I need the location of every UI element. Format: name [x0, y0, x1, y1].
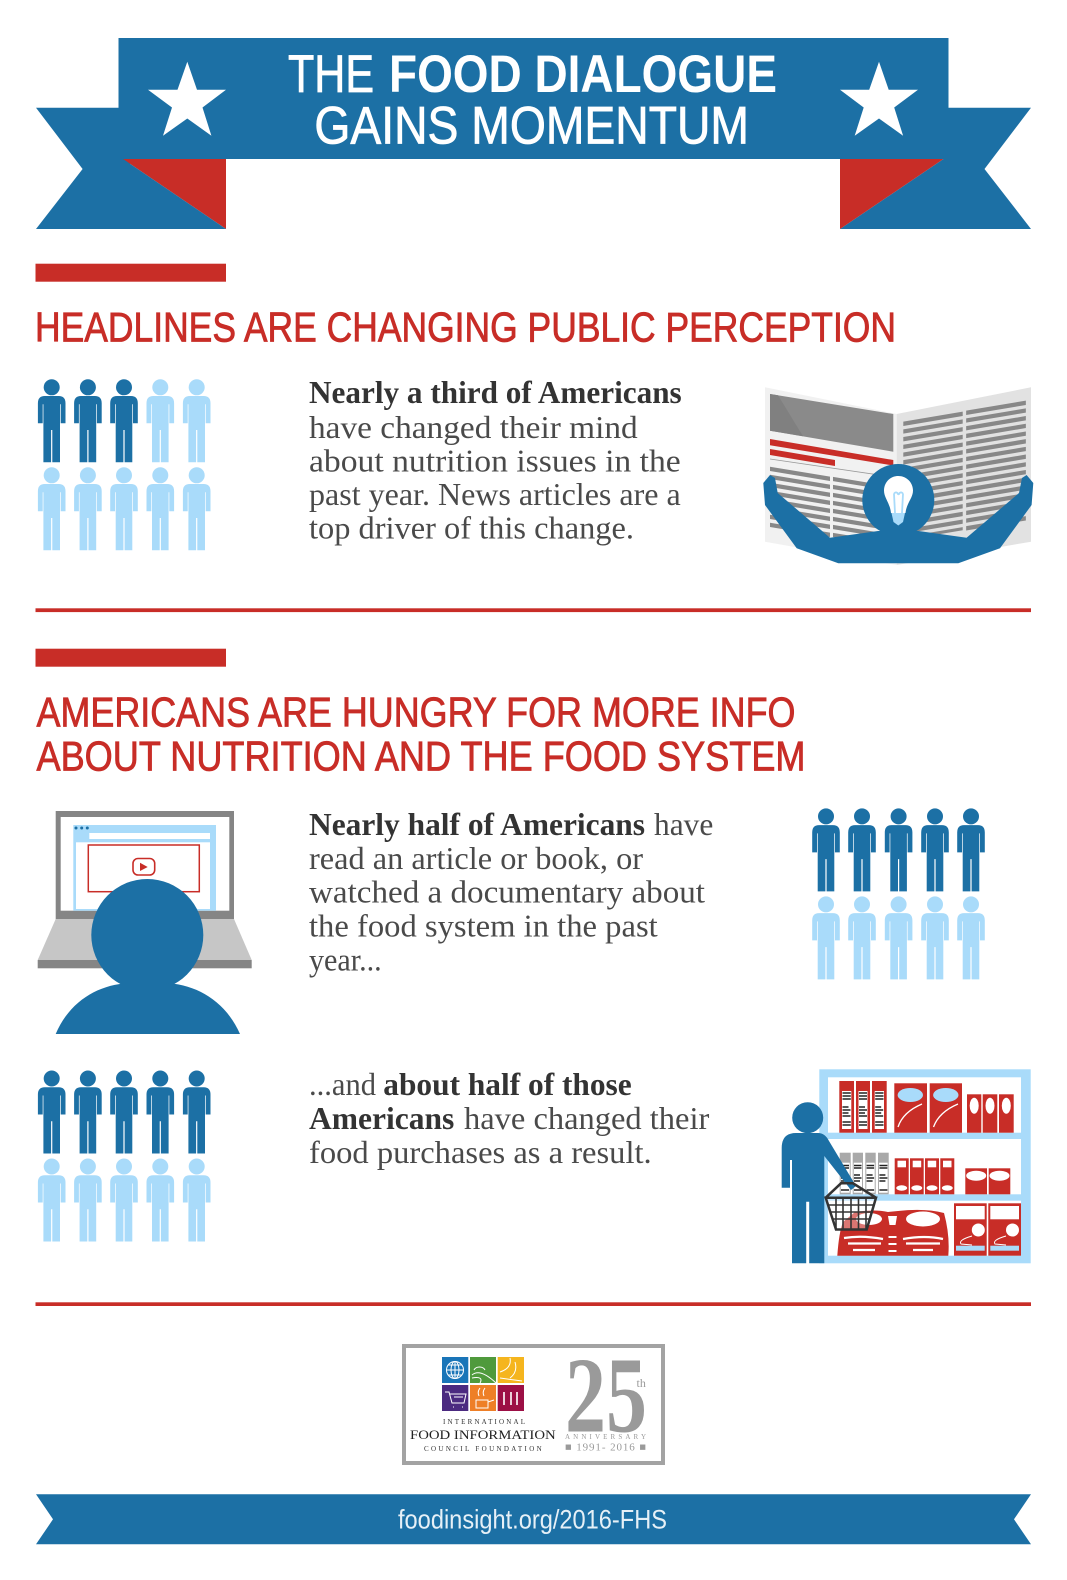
bottom shelf products [837, 1210, 949, 1256]
logo wordmark: COUNCIL FOUNDATION [424, 1445, 542, 1453]
logo wordmark: INTERNATIONAL [443, 1418, 525, 1426]
text block: about half of those: have changed their [464, 1100, 710, 1136]
reader silhouette [862, 464, 934, 536]
people chart: 3 of 10 [38, 379, 211, 550]
text block: nearly half: watched a documentary about [309, 874, 705, 910]
text block: about half of those: Americans [309, 1100, 454, 1136]
right fold [840, 159, 943, 229]
logo wordmark: FOOD INFORMATION [410, 1427, 556, 1442]
text block: nearly a third: about nutrition issues in the [309, 443, 681, 479]
text block: nearly half: year... [309, 941, 382, 977]
left star [148, 62, 226, 136]
anniversary mark: ■ 1991- 2016 ■ [565, 1442, 646, 1454]
title banner [36, 38, 1031, 229]
video player [88, 845, 199, 892]
browser window [73, 825, 216, 911]
newspaper text columns [800, 471, 864, 545]
viewer silhouette [91, 879, 203, 991]
text block: nearly a third: past year. News articles are a [309, 476, 681, 512]
logo wordmark [410, 1418, 556, 1453]
top shelf products [839, 1081, 1014, 1133]
shopper silhouette [792, 1102, 823, 1133]
title text: FOOD DIALOGUE [389, 45, 777, 104]
people chart: 5 of 10 left [38, 1070, 211, 1242]
text block: nearly half: the food system in the past [309, 908, 658, 944]
section 2 heading [36, 688, 806, 780]
newspaper photo block [770, 394, 893, 452]
text block: nearly half: read an article or book, or [309, 840, 643, 876]
light bulb [884, 476, 913, 513]
text block: about half of those: food purchases as a result. [309, 1134, 652, 1170]
text block: nearly half: Nearly half of Americans [309, 806, 645, 842]
text block: about half of those: ...and [309, 1066, 376, 1102]
text block: nearly half [309, 806, 713, 977]
text block: nearly a third: Nearly a third of Americans [309, 374, 682, 410]
icon: person at laptop watching video [38, 811, 252, 1034]
divider [36, 1302, 1031, 1306]
text block: about half of those [309, 1066, 710, 1170]
section 1 accent bar [36, 264, 226, 282]
left blue fold [123, 159, 226, 229]
section 2 heading: ABOUT NUTRITION AND THE FOOD SYSTEM [36, 732, 806, 780]
middle shelf products [840, 1153, 889, 1194]
right star [840, 62, 918, 136]
shelf frame [819, 1069, 1031, 1263]
text block: nearly a third: top driver of this change. [309, 509, 634, 545]
icon: shopper at grocery shelves [782, 1069, 1031, 1263]
icon: newspaper held by reader with light bulb [763, 387, 1033, 565]
logo tiles [442, 1357, 524, 1411]
title text [288, 45, 777, 155]
title text: GAINS MOMENTUM [314, 96, 749, 155]
banner main band [118, 38, 948, 159]
text block: about half of those: about half of those [383, 1066, 632, 1102]
anniversary mark: th [636, 1376, 646, 1390]
text block: nearly half: have [654, 806, 713, 842]
divider [36, 608, 1031, 612]
section 2 heading: AMERICANS ARE HUNGRY FOR MORE INFO [36, 688, 796, 736]
shopping basket [826, 1183, 876, 1230]
laptop keyboard [38, 919, 252, 960]
logo panel [404, 1337, 663, 1463]
anniversary mark: 25 [565, 1337, 647, 1456]
footer ribbon [36, 1494, 1031, 1544]
anniversary mark: ANNIVERSARY [565, 1433, 646, 1441]
text block: nearly a third [309, 374, 682, 545]
footer url: foodinsight.org/2016-FHS [398, 1504, 667, 1534]
laptop screen [56, 811, 234, 919]
left fold [123, 159, 226, 229]
people chart: 5 of 10 right [812, 808, 985, 979]
banner right tail [840, 108, 1031, 229]
newspaper pages [765, 387, 897, 565]
section 1 heading: HEADLINES ARE CHANGING PUBLIC PERCEPTION [35, 304, 896, 351]
title text: THE [288, 45, 374, 104]
text block: nearly a third: have changed their mind [309, 409, 638, 445]
banner left tail [36, 108, 130, 229]
newspaper red headlines [770, 439, 893, 466]
section 2 accent bar [36, 649, 226, 667]
